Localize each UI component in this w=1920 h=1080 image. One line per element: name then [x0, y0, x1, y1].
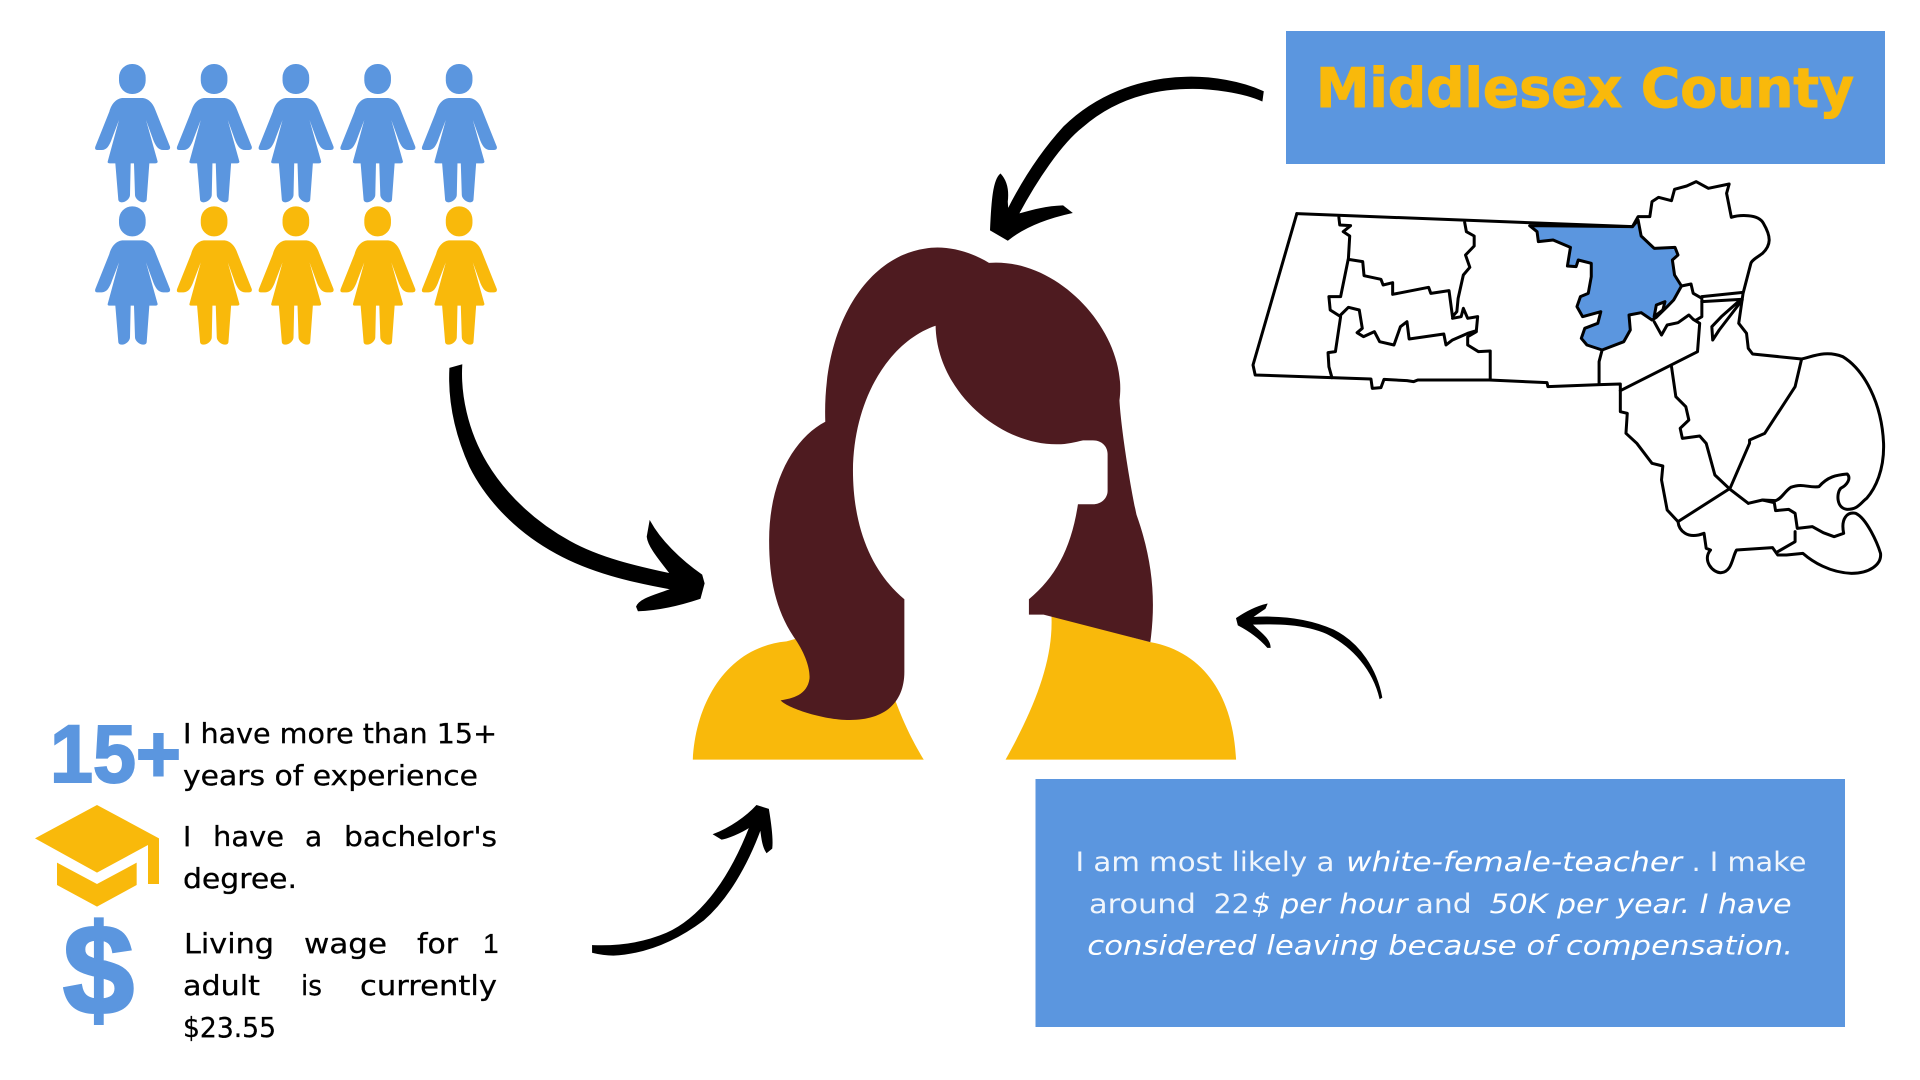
hair: [769, 247, 1153, 720]
living wage text: [183, 927, 499, 1044]
experience text: years of experience: [183, 759, 478, 792]
shirt: [693, 616, 1236, 760]
description text: considered leaving because of compensation.: [1087, 930, 1793, 962]
degree text: degree.: [183, 862, 297, 895]
description text: [1076, 847, 1806, 962]
description text: around: [1089, 889, 1196, 920]
description text: 50K per year. I have: [1490, 889, 1792, 920]
map of Massachusetts counties: [1253, 182, 1884, 573]
degree text: I: [183, 820, 191, 853]
description panel: [1036, 779, 1845, 1027]
degree text: [183, 820, 497, 895]
experience text: [183, 717, 497, 792]
Middlesex County highlighted: [1530, 220, 1681, 350]
description text: and: [1416, 889, 1472, 920]
living wage text: is: [301, 969, 322, 1002]
description text: . I make: [1692, 847, 1806, 878]
living wage text: wage: [304, 927, 387, 960]
description text: $ per hour: [1252, 889, 1410, 920]
degree text: a: [305, 820, 322, 853]
living wage text: currently: [360, 969, 497, 1002]
living wage text: for: [417, 927, 459, 960]
icon: graduation cap: [35, 805, 159, 907]
description text: white-female-teacher: [1346, 847, 1684, 878]
degree text: have: [213, 820, 284, 853]
description text: I am most likely a: [1076, 847, 1334, 878]
pictogram: ten women, six blue and four yellow: [95, 64, 497, 345]
description text: 22: [1214, 889, 1250, 920]
icon: 15+ years: 15+: [50, 709, 181, 800]
experience text: I have more than 15+: [183, 717, 497, 750]
county boundaries: [1253, 182, 1884, 573]
yellow women: [177, 206, 497, 345]
title text: Middlesex County: [1316, 57, 1854, 120]
living wage text: adult: [183, 969, 260, 1002]
arrow: pictogram to person: [450, 365, 704, 611]
degree text: bachelor's: [344, 820, 497, 853]
living wage text: 1: [483, 928, 499, 959]
living wage text: $23.55: [183, 1011, 276, 1044]
blue women: [95, 64, 497, 345]
living wage text: Living: [184, 927, 274, 960]
arrow: description to person: [1237, 604, 1382, 698]
arrow: stats to person: [593, 806, 772, 955]
title banner: [1286, 31, 1885, 164]
person silhouette: [693, 247, 1236, 760]
icon: dollar sign: $: [63, 899, 134, 1042]
arrow: title to person: [991, 77, 1263, 240]
